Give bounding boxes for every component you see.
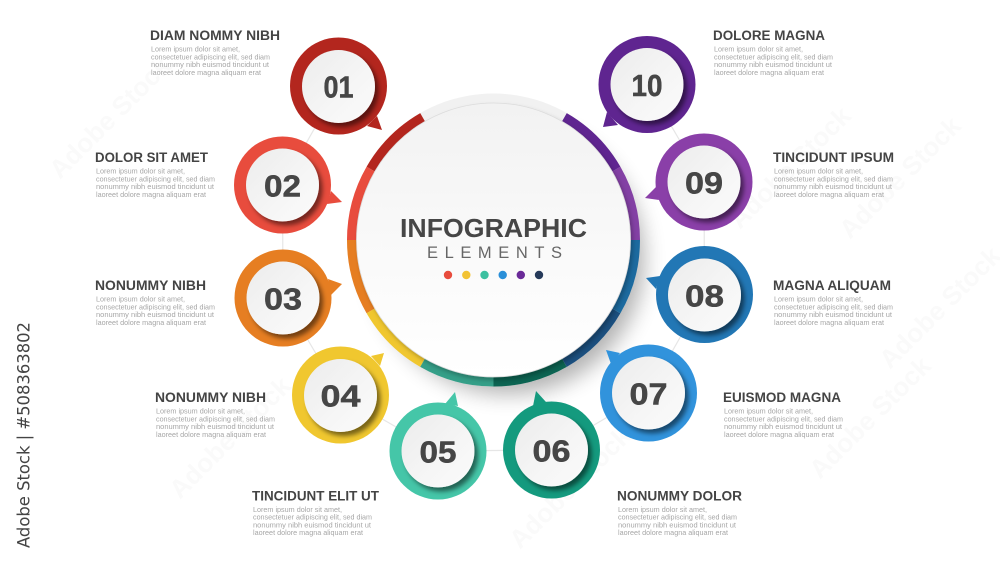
label 01: DIAM NOMMY NIBH [150, 28, 280, 43]
marker 01: 01 [324, 70, 354, 104]
label 06: nonummy nibh euismod tincidunt ut [618, 520, 737, 529]
label 04: laoreet dolore magna aliquam erat [156, 430, 267, 439]
label 04: nonummy nibh euismod tincidunt ut [156, 422, 275, 431]
label 08: MAGNA ALIQUAM [773, 278, 891, 293]
stock id vertical text: Adobe Stock | #508363802 [14, 322, 34, 548]
label 07: EUISMOD MAGNA [723, 390, 841, 405]
label 08: nonummy nibh euismod tincidunt ut [774, 310, 893, 319]
label 07: consectetuer adipiscing elit, sed diam [724, 414, 843, 423]
marker 05: 05 [420, 434, 456, 470]
label 01: Lorem ipsum dolor sit amet, [151, 44, 240, 54]
marker 08 [646, 246, 753, 343]
label 10: Lorem ipsum dolor sit amet, [714, 44, 803, 54]
marker 05 [390, 392, 486, 500]
connector lines [282, 84, 704, 451]
marker 07: 07 [630, 376, 668, 412]
label 09: Lorem ipsum dolor sit amet, [774, 166, 863, 176]
label 08 [773, 278, 893, 327]
central ground shadow [372, 122, 644, 394]
marker 09: 09 [685, 166, 723, 200]
label 09: TINCIDUNT IPSUM [773, 150, 894, 165]
label 04: Lorem ipsum dolor sit amet, [156, 406, 245, 416]
label 01: laoreet dolore magna aliquam erat [151, 68, 262, 77]
faint watermarks: Adobe Stock [163, 370, 297, 504]
faint watermarks: Adobe Stock [503, 420, 637, 554]
label 03: nonummy nibh euismod tincidunt ut [96, 310, 215, 319]
label 09 [773, 150, 894, 199]
label 08: Lorem ipsum dolor sit amet, [774, 294, 863, 304]
label 06: NONUMMY DOLOR [617, 488, 742, 504]
central base disc [347, 94, 640, 386]
label 06: Lorem ipsum dolor sit amet, [618, 505, 707, 514]
marker 06: 06 [532, 434, 570, 468]
label 10: laoreet dolore magna aliquam erat [714, 68, 825, 77]
marker 10 [598, 36, 696, 133]
label 05: Lorem ipsum dolor sit amet, [253, 505, 342, 514]
label 05 [252, 488, 380, 537]
label 02: Lorem ipsum dolor sit amet, [96, 166, 185, 176]
label 01 [150, 28, 280, 77]
label 07: nonummy nibh euismod tincidunt ut [724, 422, 843, 431]
label 04 [155, 390, 275, 439]
segmented colour ring [352, 117, 635, 382]
label 05: consectetuer adipiscing elit, sed diam [253, 513, 372, 522]
label 08: consectetuer adipiscing elit, sed diam [774, 302, 893, 311]
marker 07 [600, 344, 697, 442]
label 10 [713, 28, 833, 77]
label 02 [95, 150, 215, 199]
label 07: Lorem ipsum dolor sit amet, [724, 406, 813, 416]
faint watermarks: Adobe Stock [833, 110, 967, 244]
label 05: TINCIDUNT ELIT UT [252, 488, 380, 504]
central white disc [356, 103, 630, 377]
marker 09 [645, 134, 752, 230]
label 07: laoreet dolore magna aliquam erat [724, 430, 835, 439]
central circle [347, 94, 640, 386]
marker 02: 02 [264, 168, 301, 204]
label 01: consectetuer adipiscing elit, sed diam [151, 52, 270, 61]
label 05: laoreet dolore magna aliquam erat [253, 528, 364, 537]
marker 04 [292, 346, 389, 444]
label 03: consectetuer adipiscing elit, sed diam [96, 302, 215, 311]
label 08: laoreet dolore magna aliquam erat [774, 318, 885, 327]
label 10: nonummy nibh euismod tincidunt ut [714, 60, 833, 69]
label 10: consectetuer adipiscing elit, sed diam [714, 52, 833, 61]
label 02: DOLOR SIT AMET [95, 150, 209, 165]
title: INFOGRAPHIC [400, 215, 587, 243]
marker 03: 03 [264, 282, 302, 316]
marker 08: 08 [685, 278, 724, 314]
label 09: consectetuer adipiscing elit, sed diam [774, 174, 893, 183]
marker 04: 04 [320, 378, 361, 414]
faint watermarks: Adobe Stock [723, 100, 857, 234]
colour dots [444, 271, 543, 279]
label 03: Lorem ipsum dolor sit amet, [96, 294, 185, 304]
marker 01 [290, 38, 387, 134]
label 04: NONUMMY NIBH [155, 390, 266, 405]
label 01: nonummy nibh euismod tincidunt ut [151, 60, 270, 69]
marker 03 [234, 250, 342, 346]
label 02: laoreet dolore magna aliquam erat [96, 190, 207, 199]
marker 02 [234, 136, 342, 234]
marker 10: 10 [632, 68, 662, 103]
label 07 [723, 390, 843, 439]
label 03: NONUMMY NIBH [95, 278, 206, 293]
label 03: laoreet dolore magna aliquam erat [96, 318, 207, 327]
label 06: consectetuer adipiscing elit, sed diam [618, 513, 737, 522]
label 03 [95, 278, 215, 327]
faint watermarks: Adobe Stock [43, 50, 177, 184]
label 02: consectetuer adipiscing elit, sed diam [96, 174, 215, 183]
label 09: laoreet dolore magna aliquam erat [774, 190, 885, 199]
label 06: laoreet dolore magna aliquam erat [618, 528, 729, 537]
label 02: nonummy nibh euismod tincidunt ut [96, 182, 215, 191]
marker 06 [503, 391, 600, 498]
label 10: DOLORE MAGNA [713, 28, 825, 43]
subtitle: ELEMENTS [427, 244, 562, 262]
label 06 [617, 488, 742, 537]
label 05: nonummy nibh euismod tincidunt ut [253, 520, 372, 529]
faint watermarks: Adobe Stock [803, 350, 937, 484]
label 09: nonummy nibh euismod tincidunt ut [774, 182, 893, 191]
label 04: consectetuer adipiscing elit, sed diam [156, 414, 275, 423]
